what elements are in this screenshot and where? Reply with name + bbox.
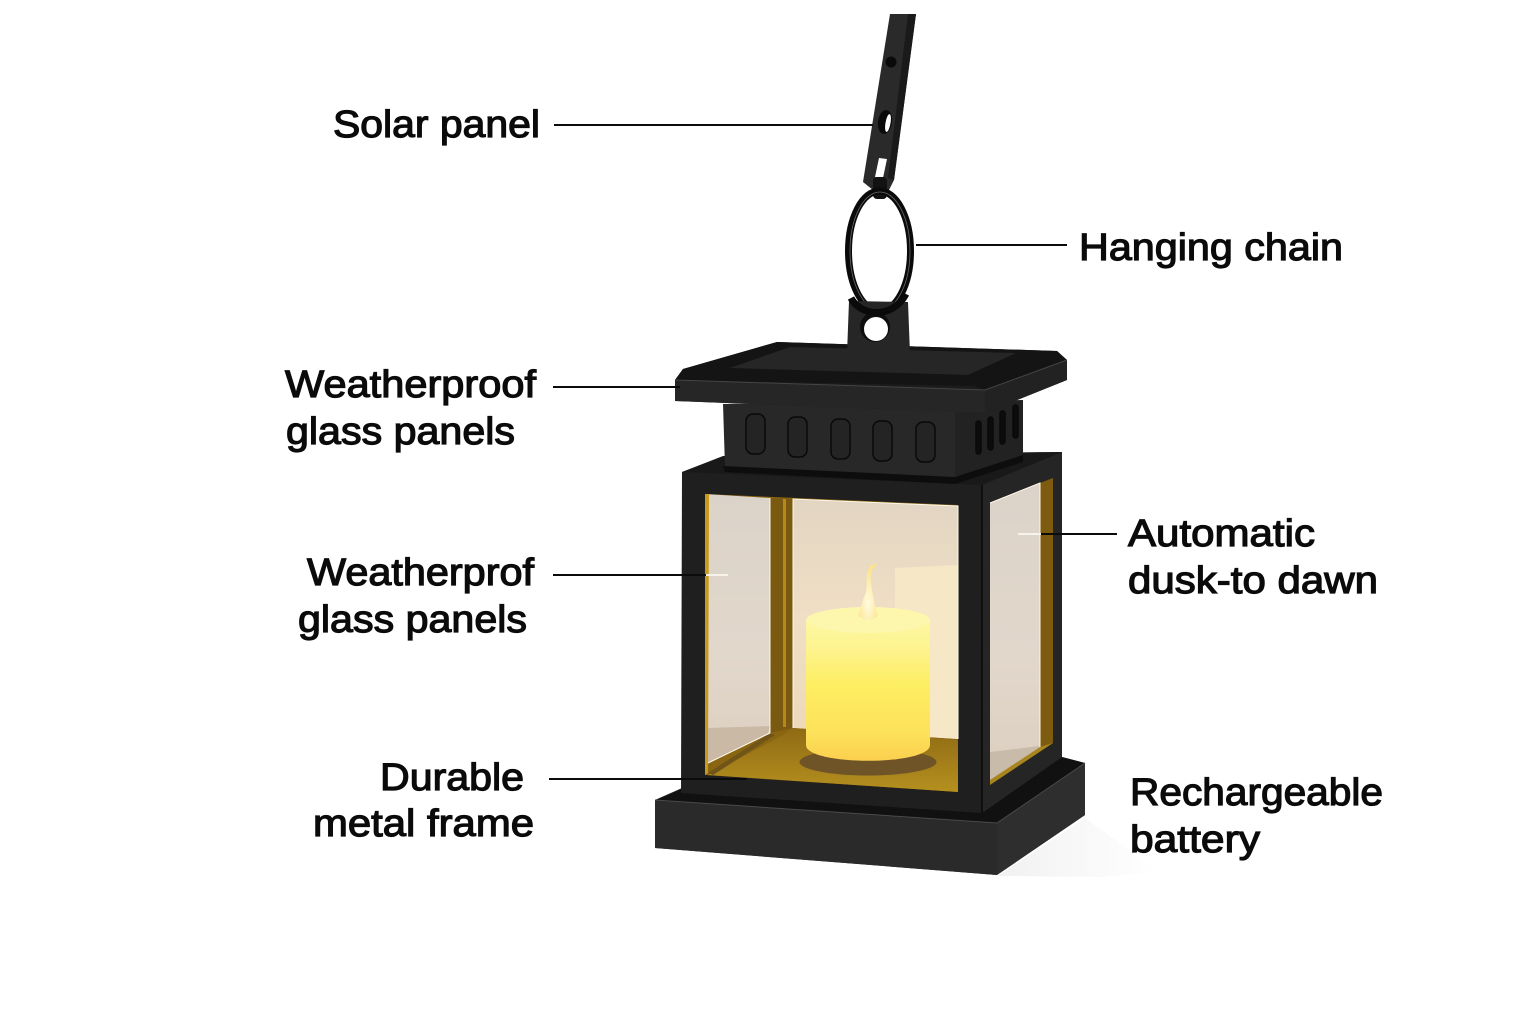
label: rechargeable battery: Rechargeable xyxy=(1130,772,1383,814)
label: automatic dusk-to dawn xyxy=(1128,513,1378,602)
lantern base xyxy=(655,757,1085,875)
glass panels and interior xyxy=(705,478,1053,792)
label: automatic dusk-to dawn: dusk-to dawn xyxy=(1128,560,1378,602)
roof vents xyxy=(746,405,1018,462)
lantern roof xyxy=(675,342,1067,484)
hanging strap xyxy=(863,14,916,199)
label: durable metal frame xyxy=(313,757,534,845)
hanging ring xyxy=(848,191,910,311)
ring mount tab xyxy=(844,294,912,358)
candle xyxy=(800,563,936,776)
label: automatic dusk-to dawn: Automatic xyxy=(1128,513,1315,555)
label: rechargeable battery xyxy=(1130,772,1383,861)
label: durable metal frame: Durable xyxy=(380,757,524,799)
label: hanging chain: Hanging chain xyxy=(1079,227,1343,269)
label: weatherproof glass panels: Weatherproof xyxy=(285,364,536,406)
label: weatherproof glass panels: glass panels xyxy=(286,411,515,453)
leader lines xyxy=(549,125,1117,779)
label: rechargeable battery: battery xyxy=(1130,819,1260,861)
lantern frame xyxy=(681,452,1062,813)
label: weatherprof glass panels xyxy=(298,552,534,641)
label: durable metal frame: metal frame xyxy=(313,803,534,845)
label: weatherprof glass panels: Weatherprof xyxy=(307,552,534,594)
base shadow xyxy=(998,818,1160,877)
label: weatherprof glass panels: glass panels xyxy=(298,599,527,641)
label: weatherproof glass panels xyxy=(285,364,536,453)
label: solar panel: Solar panel xyxy=(333,104,540,146)
